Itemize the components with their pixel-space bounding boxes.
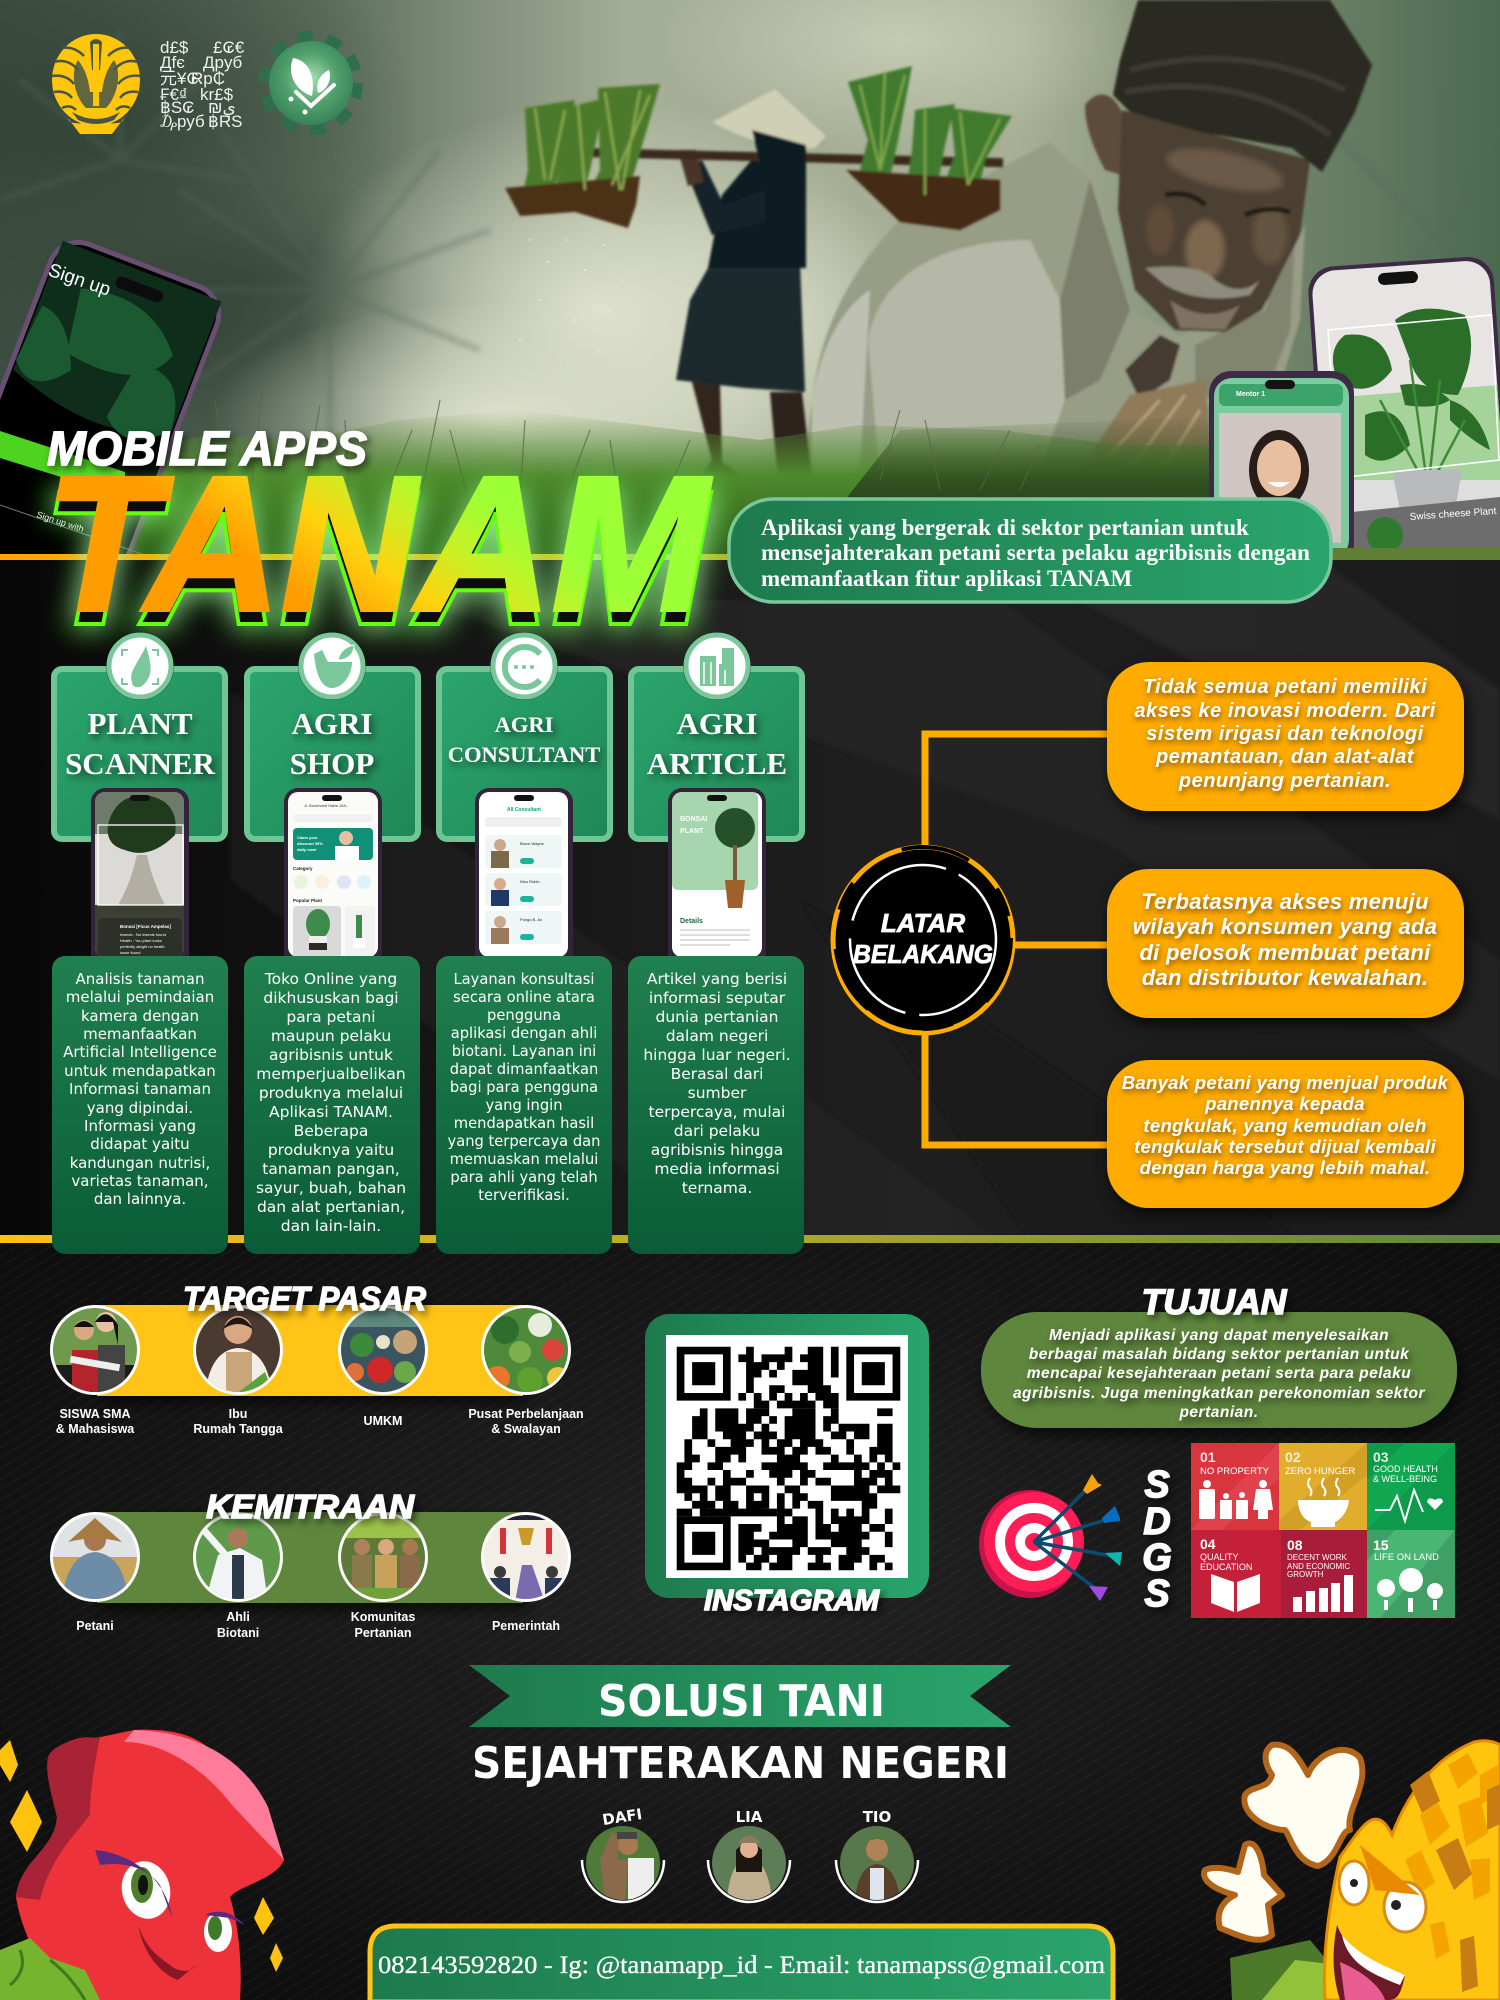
description card: plant scanner: Artificial Intelligence — [63, 1043, 217, 1061]
photo: farmer community — [338, 1512, 428, 1602]
small sign up text: Sign up with — [35, 509, 85, 534]
turban — [1113, 0, 1372, 172]
icon: chat — [490, 632, 558, 700]
woman on call — [1249, 430, 1309, 510]
feature: plant scanner: PLANT — [87, 706, 193, 741]
logo: text glyph cluster: ฿RS — [208, 112, 242, 131]
feature: plant scanner: SCANNER — [65, 746, 216, 781]
icon: mortar and leaf — [298, 632, 366, 700]
feature: plant scanner — [54, 632, 225, 968]
green bar — [97, 1512, 523, 1603]
description card: plant scanner: Informasi tanaman — [69, 1080, 211, 1098]
description card: agri consultant: terverifikasi. — [478, 1187, 570, 1204]
goal 04 — [1191, 1530, 1281, 1618]
rice bundles left — [505, 84, 660, 228]
goal 04: QUALITY — [1200, 1552, 1239, 1562]
label: SDGS vertical: S — [1144, 1573, 1170, 1615]
description card: agri article: media informasi — [654, 1160, 780, 1178]
label: SDGS vertical — [1142, 1464, 1172, 1615]
callout: tengkulak: dengan harga yang lebih mahal. — [1140, 1157, 1430, 1178]
mascot: corn — [1204, 1741, 1500, 2000]
heading: TUJUAN — [1142, 1283, 1287, 1322]
husk leaves — [1230, 1940, 1360, 2000]
phone screen: Pongo B. Ax — [520, 917, 542, 922]
title: TANAM with neon outline: TANAM — [45, 436, 712, 651]
photo: botanist — [193, 1512, 283, 1602]
label: SDGS vertical: S — [1144, 1464, 1170, 1506]
text: berbagai masalah bidang sektor pertanian untuk — [1029, 1346, 1410, 1363]
labels — [56, 1407, 584, 1436]
description pill — [729, 499, 1331, 602]
goal 01: 01 — [1200, 1449, 1216, 1465]
phone screen: Popular Plant — [293, 898, 323, 903]
description card: agri consultant: biotani. Layanan ini — [452, 1043, 596, 1060]
team: Lia — [708, 1808, 790, 1902]
feature: agri shop: SHOP — [290, 746, 374, 781]
logo: text glyph cluster: kr£$ — [200, 85, 234, 104]
phone screen: Category — [293, 866, 313, 871]
labels: Pertanian — [355, 1626, 411, 1640]
face — [1118, 110, 1310, 332]
description card: agri consultant: dapat dimanfaatkan — [450, 1061, 598, 1078]
goal 03: & WELL-BEING — [1373, 1474, 1437, 1484]
logo: text glyph cluster: Rp₵ — [191, 69, 225, 88]
phone screen: PLANT — [680, 828, 704, 835]
slogan: SEJAHTERAKAN NEGERI — [472, 1738, 1009, 1789]
tujuan pill — [981, 1312, 1457, 1428]
feature: agri article: ARTICLE — [647, 746, 787, 781]
corn body — [1324, 1741, 1500, 2000]
callout: akses konsumen: dan distributor kewalahan. — [1142, 965, 1428, 990]
description card: agri shop: para petani — [286, 1008, 376, 1026]
text — [1013, 1327, 1426, 1421]
description card: agri shop: produknya melalui — [259, 1084, 403, 1102]
sparkles — [0, 1740, 283, 1972]
card header — [631, 669, 802, 839]
labels: Biotani — [217, 1626, 259, 1640]
description card: agri consultant: para ahli yang telah — [450, 1169, 598, 1186]
goal 08: AND ECONOMIC — [1287, 1562, 1350, 1571]
photo: farmer — [50, 1512, 140, 1602]
description card: plant scanner: Informasi yang — [84, 1117, 196, 1135]
phone screen: All Consultant — [507, 807, 541, 813]
callout: tengkulak: tengkulak tersebut dijual kembali — [1134, 1136, 1436, 1157]
description card: plant scanner: memanfaatkan — [83, 1025, 197, 1043]
title: MOBILE APPS: MOBILE APPS — [47, 423, 367, 476]
water drops — [519, 239, 623, 361]
rice bundles right — [846, 66, 1012, 230]
description card: agri article: agribisnis hingga — [651, 1141, 783, 1159]
text: Menjadi aplikasi yang dapat menyelesaikan — [1049, 1327, 1389, 1344]
photo: vegetables — [481, 1305, 571, 1395]
description card: agri article: terpercaya, mulai — [649, 1103, 785, 1121]
phone screen: Health : You plant looks — [120, 938, 162, 943]
goal 15: 15 — [1373, 1537, 1389, 1553]
phone screen: daily now! — [297, 847, 317, 852]
description card: agri shop: Aplikasi TANAM. — [269, 1103, 393, 1121]
goal 02: 02 — [1285, 1449, 1301, 1465]
mouth — [138, 1925, 196, 1980]
phone screen — [475, 788, 573, 968]
phone screen: Details — [680, 918, 703, 925]
banner: solusi tani: SOLUSI TANI — [598, 1676, 885, 1727]
team: Lia: LIA — [736, 1808, 763, 1826]
plant scanner phone, top right: Swiss cheese Plant — [1409, 506, 1497, 523]
description card: agri shop: Beberapa — [294, 1122, 368, 1140]
mentor video call phone — [1209, 371, 1354, 566]
goal 01 — [1191, 1443, 1279, 1530]
goal 08: 08 — [1287, 1537, 1303, 1553]
description card: agri article: Artikel yang berisi — [647, 970, 787, 988]
phone screen: Bruce Wayne — [520, 841, 545, 846]
description card: agri shop: tanaman pangan, — [262, 1160, 400, 1178]
phone screen — [284, 788, 382, 968]
mouth — [1334, 1925, 1405, 2000]
card header — [247, 669, 418, 839]
description card: plant scanner — [52, 956, 228, 1254]
logo: text glyph cluster: ฿S₢ — [160, 98, 194, 117]
farmer woman with rice bundles — [505, 66, 1012, 488]
straw bundle — [1096, 380, 1209, 452]
description pill: mensejahterakan petani serta pelaku agribisnis dengan — [761, 540, 1310, 565]
description card: agri article: sumber — [688, 1084, 747, 1102]
team: Dafi — [582, 1805, 664, 1902]
callout: inovasi: sistem irigasi dan teknologi — [1146, 723, 1424, 745]
hero photo: misty rice field — [0, 0, 1500, 557]
description card: agri article: dunia pertanian — [656, 1008, 778, 1026]
callout: akses konsumen: wilayah konsumen yang ada — [1133, 914, 1437, 939]
description card: agri consultant: aplikasi dengan ahli — [451, 1025, 597, 1042]
description card: agri consultant: yang ingin — [485, 1097, 563, 1114]
team: Tio — [836, 1808, 918, 1902]
logo: text glyph cluster: 元¥₢ — [160, 69, 199, 88]
feature: agri shop — [247, 632, 418, 968]
goal 08: DECENT WORK — [1287, 1553, 1348, 1562]
description card: agri article: informasi seputar — [649, 989, 786, 1007]
description card: agri consultant: yang terpercaya dan — [448, 1133, 600, 1150]
description card: plant scanner: Analisis tanaman — [76, 970, 204, 988]
panel: tujuan — [981, 1283, 1457, 1428]
labels: Pemerintah — [492, 1619, 560, 1633]
phone screen: discount 30% — [297, 841, 323, 846]
logo: tanam gear — [265, 37, 357, 129]
description card: agri article: dari pelaku — [674, 1122, 760, 1140]
callout: inovasi: penunjang pertanian. — [1178, 770, 1391, 792]
neck and ear — [1085, 95, 1125, 175]
photo: market — [338, 1305, 428, 1395]
labels: Rumah Tangga — [193, 1422, 284, 1436]
goal 15: LIFE ON LAND — [1374, 1552, 1439, 1563]
heading: KEMITRAAN — [206, 1488, 415, 1525]
heading: TARGET PASAR — [183, 1280, 426, 1317]
divider line middle — [0, 1235, 1500, 1243]
card header — [439, 669, 610, 839]
callout: tengkulak: tengkulak, yang kemudian oleh — [1143, 1115, 1427, 1136]
phone screen: Nico Robin — [520, 879, 540, 884]
eyes — [1339, 1845, 1426, 1932]
callout: inovasi: pemantauan, dan alat-alat — [1155, 746, 1415, 768]
callout: akses konsumen: Terbatasnya akses menuju — [1141, 889, 1429, 914]
logo: text glyph cluster: ₣€₫ — [160, 85, 188, 104]
description card: plant scanner: dan lainnya. — [94, 1190, 186, 1208]
feature: agri consultant: CONSULTANT — [448, 742, 600, 767]
logo: text glyph cluster: ₪ي — [208, 98, 236, 117]
team: Tio: TIO — [863, 1808, 891, 1826]
callout: inovasi: Tidak semua petani memiliki — [1143, 676, 1427, 698]
phone screen: Insects : No insects found — [120, 932, 166, 937]
contact box — [370, 1926, 1113, 2000]
callout: tengkulak: Banyak petani yang menjual produk — [1122, 1072, 1450, 1093]
shirt — [808, 143, 1306, 451]
description card: plant scanner: yang dipindai. — [87, 1099, 193, 1117]
description card: agri article: Berasal dari — [671, 1065, 763, 1083]
description card: agri consultant — [436, 956, 612, 1254]
description card: agri consultant: secara online atara — [453, 989, 595, 1006]
description card: plant scanner: untuk mendapatkan — [64, 1062, 216, 1080]
monstera plant — [1333, 309, 1490, 461]
description card: plant scanner: melalui pemindaian — [66, 988, 214, 1006]
labels: Komunitas — [351, 1610, 415, 1624]
photo: housewife — [193, 1305, 283, 1395]
logo: text glyph cluster: ₯руб — [160, 112, 205, 131]
goal 02 — [1279, 1443, 1367, 1530]
eye right — [204, 1912, 245, 1952]
description card: plant scanner: kamera dengan — [81, 1007, 199, 1025]
logo: university emblem — [52, 34, 140, 134]
description card: agri shop: dan lain-lain. — [281, 1217, 381, 1235]
labels: Ibu — [229, 1407, 247, 1421]
SDGs goals grid — [1191, 1443, 1455, 1618]
callout: akses konsumen: di pelosok membuat petani — [1139, 940, 1431, 965]
description card: agri article: dalam negeri — [666, 1027, 768, 1045]
feature: agri consultant: AGRI — [495, 712, 553, 737]
labels: Petani — [76, 1619, 114, 1633]
mascot: red chili — [0, 1730, 284, 2000]
icon: target with arrows — [979, 1474, 1122, 1601]
mentor video call phone: Mentor 1 — [1236, 391, 1265, 398]
description card: agri consultant: mendapatkan hasil — [454, 1115, 594, 1132]
text: mencapai kesejahteraan petani serta para pelaku — [1027, 1365, 1411, 1382]
banner: solusi tani — [469, 1665, 1011, 1727]
labels: & Swalayan — [491, 1422, 561, 1436]
description card: plant scanner: varietas tanaman, — [71, 1172, 209, 1190]
logo: text glyph cluster: Дрyб — [203, 53, 242, 72]
phone screen: Jl. Boulevard Hatta 15A... — [304, 803, 349, 808]
text: pertanian. — [1178, 1404, 1259, 1421]
labels: Ahli — [226, 1610, 250, 1624]
logo: text glyph cluster: d£$ — [160, 38, 189, 57]
callout: tengkulak: panennya kepada — [1204, 1093, 1365, 1114]
logo: text glyph cluster — [160, 38, 245, 131]
label: SDGS vertical: D — [1143, 1501, 1171, 1543]
connector lines — [925, 734, 1107, 1145]
feature: agri shop: AGRI — [292, 706, 372, 741]
callout: inovasi — [1107, 662, 1464, 811]
panel: kemitraan — [50, 1488, 571, 1640]
QR code card — [645, 1314, 929, 1617]
goal 04: 04 — [1200, 1536, 1216, 1552]
phone screen: issue found — [120, 950, 140, 955]
callout: tengkulak — [1107, 1060, 1464, 1208]
phone screen: BONSAI — [680, 816, 707, 823]
latar belakang badge: LATAR — [881, 908, 965, 938]
icon: article charts — [683, 632, 751, 700]
phone screen — [668, 788, 766, 968]
logo: text glyph cluster: Дfє — [160, 53, 185, 72]
feature: agri article: AGRI — [677, 706, 757, 741]
goal 08: GROWTH — [1287, 1570, 1324, 1579]
feature: agri article — [631, 632, 802, 968]
description card: agri consultant: Layanan konsultasi — [454, 971, 594, 988]
phone screen: Bonsai [Ficus Ampelas] — [120, 924, 171, 929]
labels — [76, 1610, 560, 1640]
title: TANAM with neon outline: TANAM — [42, 450, 712, 665]
description card: agri consultant: memuaskan melalui — [450, 1151, 598, 1168]
popcorn big — [1244, 1745, 1362, 1866]
labels: Pusat Perbelanjaan — [468, 1407, 584, 1421]
description card: plant scanner: didapat yaitu — [90, 1135, 190, 1153]
palm trees in the mist — [49, 104, 491, 434]
description card: agri shop: agribisnis untuk — [269, 1046, 393, 1064]
panel: target pasar — [50, 1280, 584, 1436]
popcorn small — [1204, 1843, 1282, 1940]
team: Dafi: DAFI — [601, 1805, 643, 1829]
callout: inovasi: akses ke inovasi modern. Dari — [1134, 700, 1436, 722]
leaves — [0, 1938, 100, 2000]
description card: agri consultant: pengguna — [487, 1007, 561, 1024]
description card: agri article: ternama. — [682, 1179, 752, 1197]
eye left — [95, 1850, 176, 1924]
logo: text glyph cluster: £₢€ — [213, 38, 245, 57]
goal 02: ZERO HUNGER — [1285, 1466, 1355, 1477]
plant scanner phone, top right — [1300, 250, 1500, 571]
scan frame — [1328, 315, 1499, 478]
goal 04: EDUCATION — [1200, 1562, 1252, 1572]
green swoosh — [0, 431, 125, 497]
instagram label: INSTAGRAM — [704, 1585, 880, 1617]
phone screen: perfectly alright no health — [120, 944, 165, 949]
card header — [54, 669, 225, 839]
latar belakang badge — [833, 847, 1013, 1033]
description pill: Aplikasi yang bergerak di sektor pertanian untuk — [761, 515, 1249, 540]
qr code — [677, 1347, 900, 1570]
labels: SISWA SMA — [59, 1407, 131, 1421]
photo: government — [481, 1512, 571, 1602]
description card: agri consultant: bagi para pengguna — [450, 1079, 598, 1096]
icon: leaf scan — [106, 632, 174, 700]
description card: agri article: hingga luar negeri. — [643, 1046, 791, 1064]
description card: agri shop: memperjualbelikan — [256, 1065, 406, 1083]
latar belakang badge: BELAKANG — [853, 939, 993, 969]
goal 15 — [1367, 1530, 1455, 1618]
goal 03 — [1367, 1443, 1455, 1530]
label: SDGS vertical: G — [1142, 1537, 1172, 1579]
phone: sign up screen tilted — [0, 234, 227, 951]
description card: agri shop: sayur, buah, bahan — [256, 1179, 406, 1197]
goal 01: NO PROPERTY — [1200, 1466, 1270, 1477]
goal 08 — [1281, 1530, 1367, 1618]
divider line top — [0, 554, 1500, 560]
description card: agri shop: dan alat pertanian, — [257, 1198, 405, 1216]
description card: plant scanner: kandungan nutrisi, — [70, 1154, 210, 1172]
labels: & Mahasiswa — [56, 1422, 135, 1436]
grass — [0, 390, 1240, 557]
feature: agri consultant — [439, 632, 610, 968]
contact box: 082143592820 - Ig: @tanamapp_id - Email: tanamapss@gmail.com — [378, 1952, 1106, 1979]
description card: agri article — [628, 956, 804, 1254]
description card: agri shop — [244, 956, 420, 1254]
phone screen: Claim your — [297, 835, 318, 840]
old farmer portrait — [800, 0, 1372, 500]
callout: akses konsumen — [1107, 869, 1464, 1018]
sign up label: Sign up — [45, 260, 113, 301]
info panel — [1352, 496, 1500, 560]
goal 03: 03 — [1373, 1449, 1389, 1465]
phone screen — [91, 788, 189, 968]
yellow bar — [97, 1305, 523, 1396]
description card: agri shop: Toko Online yang — [264, 970, 397, 988]
title: TANAM with neon outline: TANAM — [42, 450, 712, 665]
text: agribisnis. Juga meningkatkan perekonomian sektor — [1013, 1385, 1426, 1402]
description pill: memanfaatkan fitur aplikasi TANAM — [761, 566, 1133, 591]
description card: agri shop: dikhususkan bagi — [263, 989, 399, 1007]
labels: UMKM — [364, 1414, 402, 1428]
description card: agri shop: maupun pelaku — [271, 1027, 391, 1045]
photo: students — [50, 1305, 140, 1395]
goal 03: GOOD HEALTH — [1373, 1464, 1438, 1474]
description card: agri shop: produknya yaitu — [268, 1141, 394, 1159]
